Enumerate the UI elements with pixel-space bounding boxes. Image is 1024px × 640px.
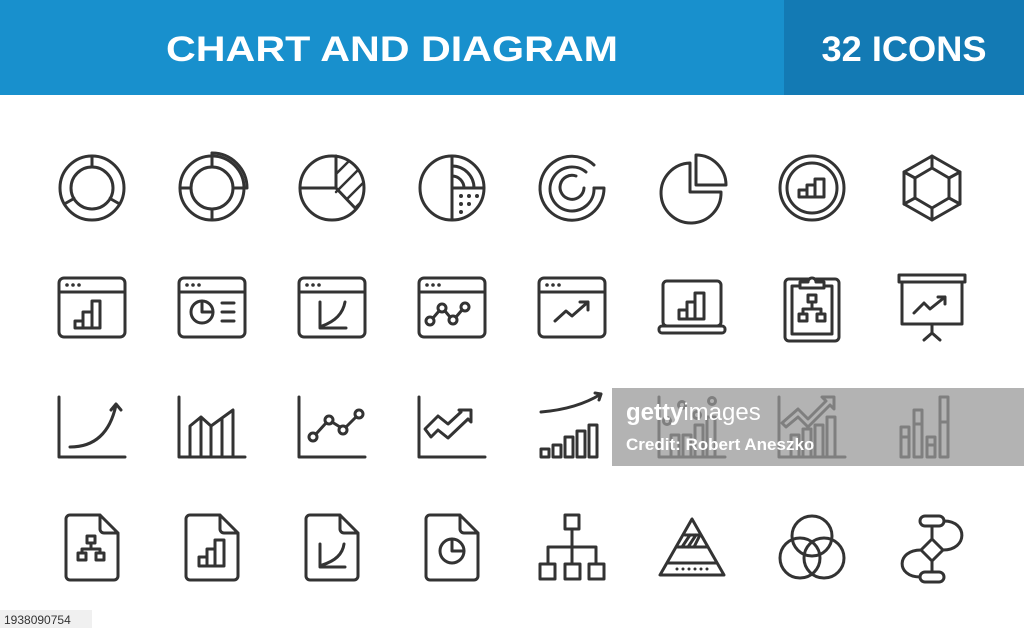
- icon: presentation board: [899, 275, 965, 340]
- icon grid: [59, 153, 965, 582]
- icon: browser pie and list: [179, 278, 245, 337]
- icon: zigzag arrow chart: [419, 397, 485, 457]
- icon: pie with arcs and dots: [420, 156, 484, 220]
- icon: venn diagram: [780, 516, 844, 578]
- image id: 1938090754: [4, 613, 71, 627]
- icon: gem hexagon: [904, 156, 960, 220]
- icon: document bar chart: [186, 515, 238, 580]
- icon count: 32 ICONS: [822, 30, 986, 69]
- icon: exploded pie: [661, 155, 726, 223]
- icon: document curve: [306, 515, 358, 580]
- icon: concentric arcs: [540, 156, 604, 220]
- icon: document org chart: [66, 515, 118, 580]
- watermark band: [612, 388, 1024, 466]
- icon: browser trend arrow: [539, 278, 605, 337]
- image id: [0, 610, 92, 628]
- icon: growth curve: [59, 397, 125, 457]
- icon: badge with bar chart: [780, 156, 844, 220]
- icon: document pie: [426, 515, 478, 580]
- header banner: [0, 0, 1024, 95]
- icon: line over bars: [659, 397, 725, 457]
- icon: laptop bar chart: [659, 281, 725, 333]
- icon: hierarchy: [540, 515, 604, 579]
- icon: clipboard org chart: [785, 278, 839, 341]
- icon: area bar chart: [179, 397, 245, 457]
- icon: flowchart: [902, 516, 962, 582]
- title: CHART AND DIAGRAM: [166, 30, 618, 69]
- watermark logo text: gettyimages: [626, 399, 761, 426]
- icon: browser bar chart: [59, 278, 125, 337]
- icon: segmented donut: [180, 153, 247, 220]
- icon: line chart points: [299, 397, 365, 457]
- icon: pyramid: [660, 519, 724, 575]
- icon: arrow over bars: [779, 397, 845, 457]
- icon: donut chart: [60, 156, 124, 220]
- icon: browser curve: [299, 278, 365, 337]
- icon: browser line points: [419, 278, 485, 337]
- watermark credit: Credit: Robert Aneszko: [626, 435, 814, 454]
- icon: stacked bars: [901, 397, 948, 457]
- icon: hatched pie: [300, 156, 372, 220]
- icon: growth bars with arrow: [541, 393, 601, 457]
